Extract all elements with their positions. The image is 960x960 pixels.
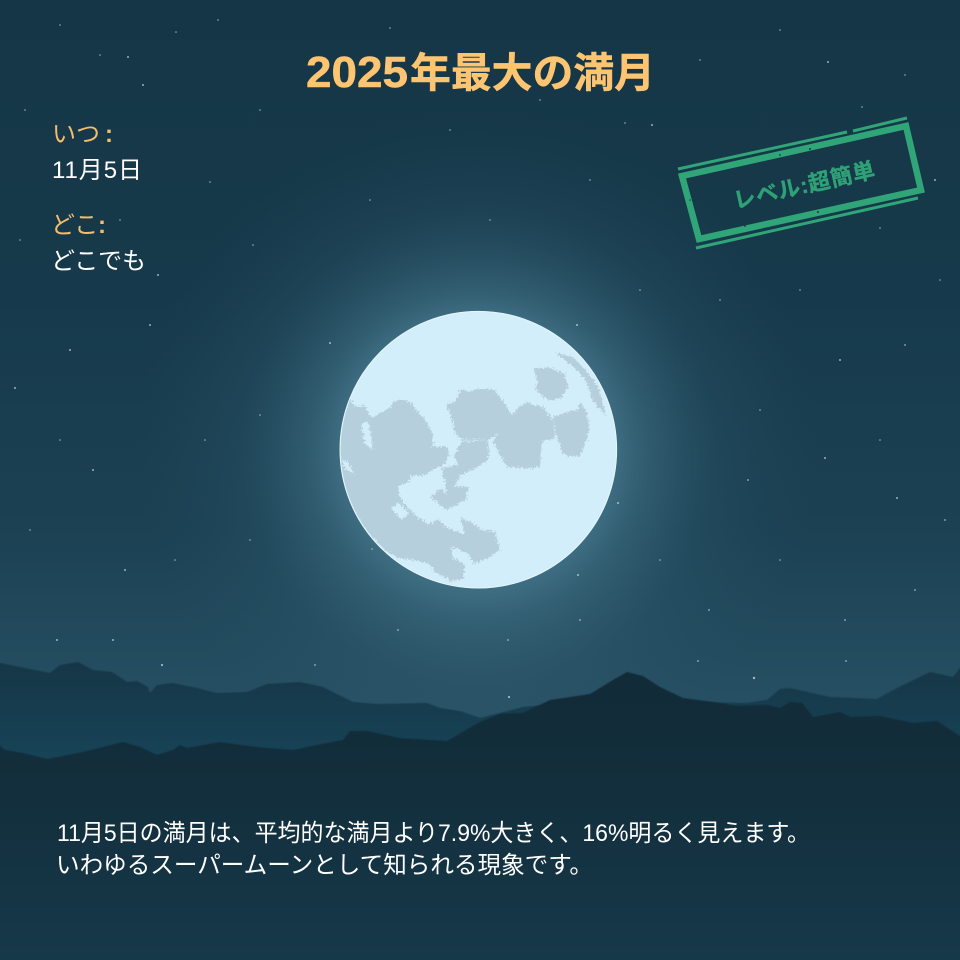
info: where (51, 212, 146, 275)
stamp specks (689, 148, 909, 227)
stamp: difficulty level (678, 118, 921, 248)
when label: : (105, 121, 113, 148)
front mountain range (0, 672, 960, 960)
title: 2025 (306, 48, 408, 97)
moon maria (335, 353, 606, 582)
moon (335, 311, 617, 588)
info: when (52, 121, 142, 184)
where label: どこ (51, 212, 98, 239)
moon disc (340, 311, 617, 588)
stamp text: レベル:超簡単 (731, 158, 877, 213)
title: 年最大の満月 (410, 50, 655, 96)
stamp outer lines (678, 118, 918, 248)
when label: いつ (52, 121, 100, 148)
where value: どこでも (51, 248, 146, 275)
body line 2: いわゆるスーパームーンとして知られる現象です。 (56, 852, 593, 879)
when value: 11月5日 (52, 157, 142, 184)
back mountain range (0, 659, 960, 800)
stamp frame (682, 126, 921, 239)
where label: : (98, 212, 106, 239)
body text (56, 820, 810, 879)
title (306, 48, 655, 97)
stars (14, 19, 946, 698)
body line 1: 11月5日の満月は、平均的な満月より7.9%大きく、16%明るく見えます。 (57, 820, 810, 847)
moon glow (138, 109, 818, 789)
